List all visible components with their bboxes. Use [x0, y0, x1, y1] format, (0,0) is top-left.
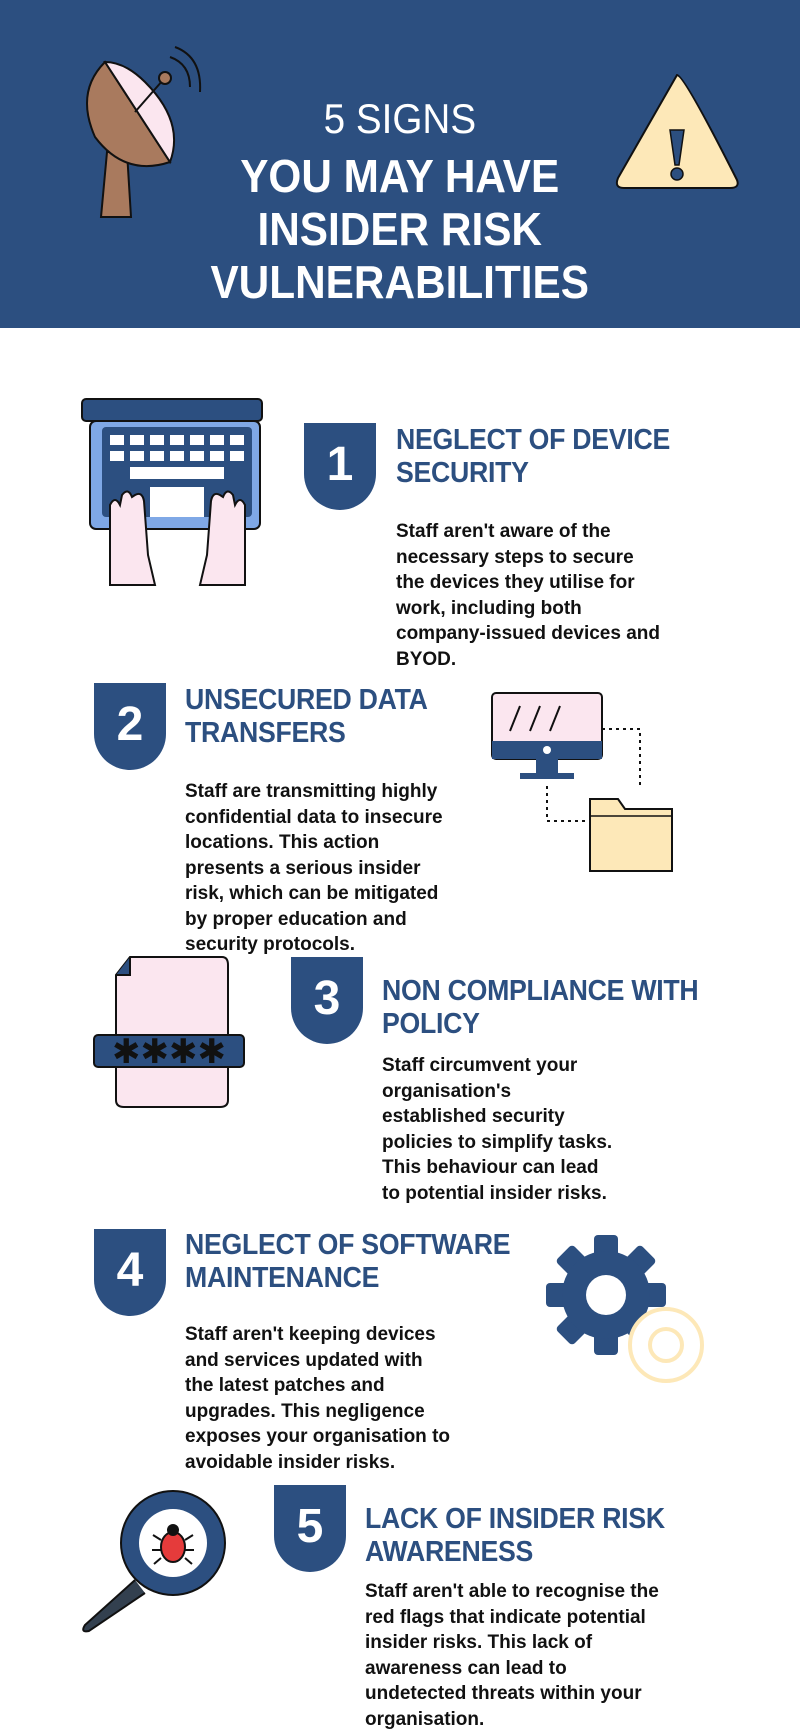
badge 4 [94, 1229, 166, 1316]
body 2: security protocols. [185, 934, 355, 955]
body 2: confidential data to insecure [185, 806, 443, 828]
body 3: organisation's [382, 1080, 511, 1102]
body 3: This behaviour can lead [382, 1157, 598, 1178]
section 1 [81, 398, 670, 670]
body 2: locations. This action [185, 832, 379, 853]
body 1: company-issued devices and [396, 623, 660, 644]
badge 1 [304, 423, 376, 510]
icon: gears [546, 1235, 704, 1383]
body 4: and services updated with [185, 1350, 423, 1370]
heading 1 [396, 424, 670, 489]
title main: YOU MAY HAVE [240, 150, 560, 202]
body 4: upgrades. This negligence [185, 1400, 425, 1422]
body 5: undetected threats within your [365, 1683, 642, 1704]
body 3: to potential insider risks. [382, 1182, 607, 1204]
badge 3: 3 [314, 972, 340, 1025]
body 5: Staff aren't able to recognise the [365, 1581, 659, 1602]
body 2: presents a serious insider [185, 858, 420, 878]
body 1 [396, 521, 660, 670]
badge 1: 1 [327, 438, 353, 491]
heading 2: UNSECURED DATA [185, 684, 428, 716]
body 5: insider risks. This lack of [365, 1632, 592, 1653]
title main [210, 150, 589, 308]
heading 5: LACK OF INSIDER RISK [365, 1503, 665, 1535]
heading 1: NEGLECT OF DEVICE [396, 424, 670, 456]
badge 2: 2 [117, 698, 143, 751]
body 5 [365, 1581, 659, 1730]
body 2: risk, which can be mitigated [185, 883, 438, 904]
section 4 [94, 1229, 704, 1472]
body 2: Staff are transmitting highly [185, 781, 437, 802]
title main: INSIDER RISK [258, 203, 542, 255]
heading 4 [185, 1229, 510, 1294]
badge 3 [291, 957, 363, 1044]
title main: VULNERABILITIES [211, 256, 589, 308]
badge 5 [274, 1485, 346, 1572]
heading 2 [185, 684, 428, 749]
heading 4: NEGLECT OF SOFTWARE [185, 1229, 510, 1261]
body 4: the latest patches and [185, 1375, 385, 1396]
title line 1: 5 SIGNS [324, 95, 476, 142]
heading 3: NON COMPLIANCE WITH [382, 975, 698, 1007]
body 1: work, including both [396, 598, 582, 618]
icon: magnifier with bug [82, 1490, 226, 1632]
section 3 [93, 956, 698, 1204]
section 2 [94, 683, 673, 955]
icon: password document [93, 956, 245, 1108]
body 2 [185, 781, 443, 955]
body 1: BYOD. [396, 648, 456, 670]
section 5 [82, 1485, 665, 1730]
heading 3 [382, 975, 698, 1040]
body 4: avoidable insider risks. [185, 1452, 395, 1472]
body 4 [185, 1324, 450, 1472]
icon: satellite dish [86, 46, 202, 218]
icon: laptop with hands [81, 398, 263, 586]
body 3: Staff circumvent your [382, 1055, 577, 1076]
header banner [0, 0, 800, 328]
body 5: red flags that indicate potential [365, 1606, 646, 1628]
heading 5 [365, 1503, 665, 1568]
body 3: policies to simplify tasks. [382, 1132, 612, 1152]
icon: password document: ✱✱✱✱ [112, 1033, 226, 1071]
heading 5: AWARENESS [365, 1536, 533, 1568]
body 5: awareness can lead to [365, 1658, 567, 1678]
badge 2 [94, 683, 166, 770]
heading 2: TRANSFERS [185, 717, 346, 749]
body 1: necessary steps to secure [396, 546, 634, 568]
body 4: Staff aren't keeping devices [185, 1324, 436, 1345]
body 1: the devices they utilise for [396, 572, 635, 593]
heading 3: POLICY [382, 1008, 480, 1040]
heading 1: SECURITY [396, 457, 529, 489]
badge 4: 4 [117, 1244, 143, 1297]
icon: computer and folder [491, 692, 673, 872]
icon: warning triangle [616, 74, 739, 189]
body 3 [382, 1055, 612, 1204]
body 5: organisation. [365, 1708, 484, 1730]
body 3: established security [382, 1106, 565, 1127]
body 2: by proper education and [185, 908, 407, 930]
body 4: exposes your organisation to [185, 1426, 450, 1447]
heading 4: MAINTENANCE [185, 1262, 379, 1294]
body 1: Staff aren't aware of the [396, 521, 611, 542]
badge 5: 5 [297, 1500, 323, 1553]
